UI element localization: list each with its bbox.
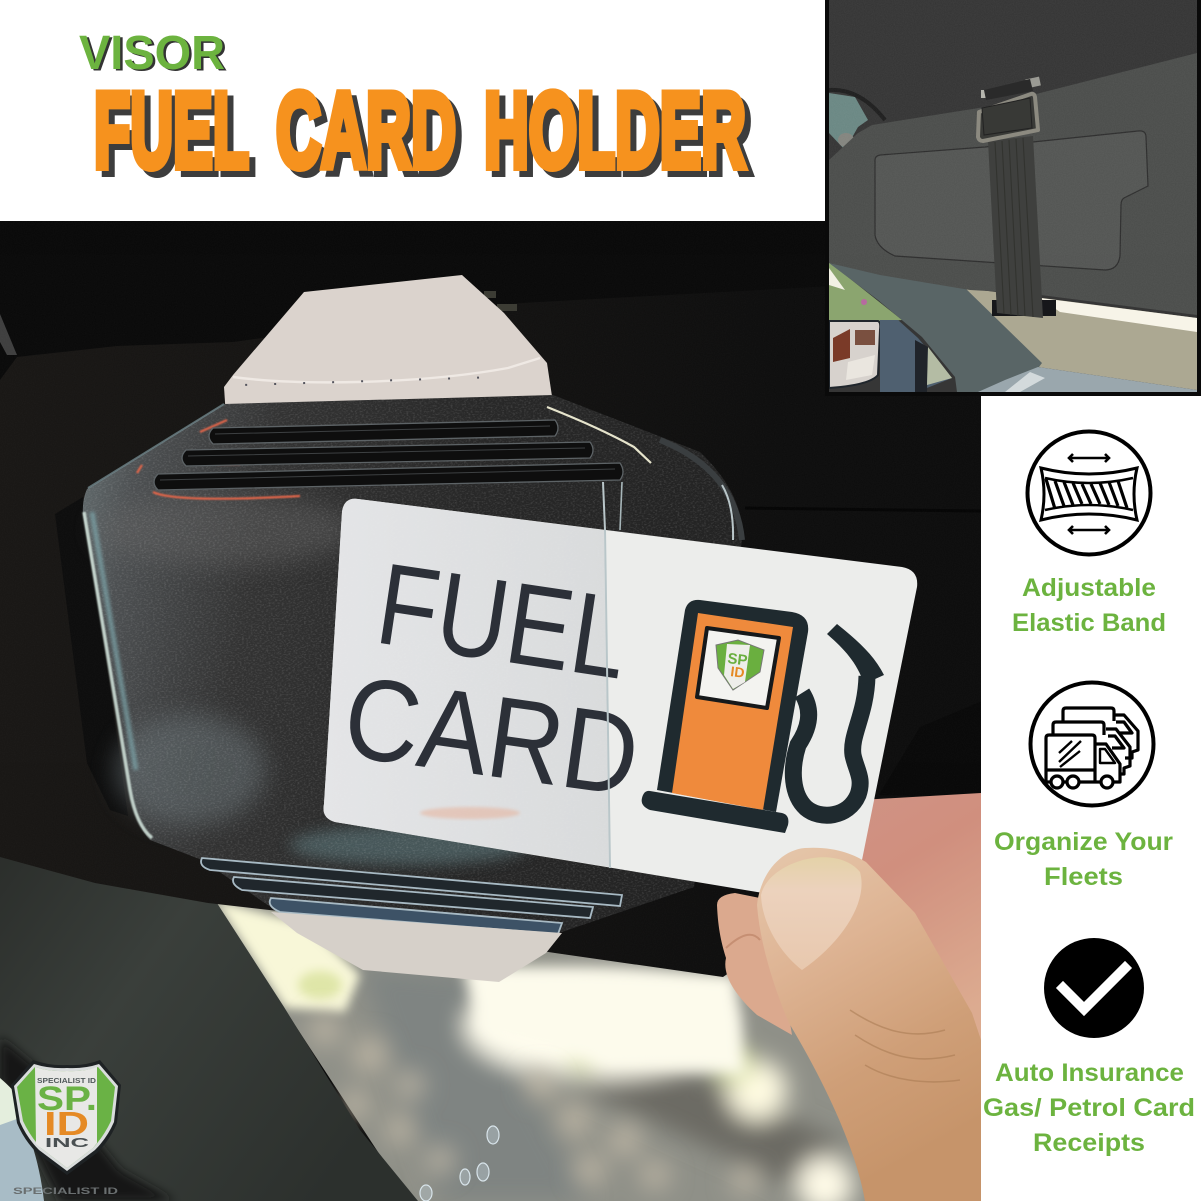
panel: inset photo of elastic band on visor xyxy=(825,0,1201,396)
main photo: visor with fuel card holder xyxy=(0,221,985,1201)
logo: Specialist ID Inc shield xyxy=(11,1060,121,1197)
title: FUEL CARD HOLDER xyxy=(94,70,752,196)
dashboard xyxy=(978,367,1197,392)
card section inside pocket xyxy=(320,495,615,875)
title: VISOR: VISOR xyxy=(79,27,225,80)
visor body xyxy=(829,53,1197,315)
label: Auto Insurance Gas/ Petrol Card Receipts xyxy=(983,1059,1195,1157)
icon: fuel pump xyxy=(642,600,884,833)
label: Organize Your Fleets xyxy=(994,828,1173,891)
blurred outdoor background xyxy=(218,904,865,1201)
label: Auto Insurance Gas/ Petrol Card Receipts: Gas/ Petrol Card xyxy=(983,1094,1195,1122)
icon: check mark xyxy=(1044,938,1144,1038)
thumb xyxy=(757,848,981,1201)
visor mount xyxy=(829,93,868,150)
mini shield logo: SP xyxy=(727,650,748,669)
thumb nail xyxy=(761,857,862,970)
mini shield logo: ID xyxy=(730,663,745,681)
pocket seam xyxy=(603,482,610,868)
icon: elastic band xyxy=(1028,432,1150,554)
blurred corner reflection xyxy=(0,1037,175,1201)
foliage xyxy=(829,262,902,325)
logo wordmark: SPECIALIST ID xyxy=(13,1186,118,1197)
label: Auto Insurance Gas/ Petrol Card Receipts: Receipts xyxy=(1033,1129,1145,1157)
side mirror xyxy=(829,321,880,388)
label: Adjustable Elastic Band xyxy=(1012,574,1166,637)
visor clips xyxy=(484,291,517,311)
clear vinyl pocket xyxy=(80,390,750,940)
strap buckle xyxy=(978,94,1038,141)
hand holding card xyxy=(717,848,981,1201)
card text: CARD: CARD xyxy=(337,651,647,821)
pocket ridges: bottom xyxy=(201,858,622,934)
panel: features column xyxy=(981,396,1201,1201)
A pillar xyxy=(829,263,1042,392)
windshield pillar xyxy=(0,850,418,1201)
orange reflections xyxy=(137,420,300,499)
windshield view xyxy=(965,288,1197,390)
logo text xyxy=(37,1078,97,1150)
visor flap xyxy=(875,131,1148,270)
title: VISOR: VISOR xyxy=(82,28,228,82)
label: Adjustable Elastic Band: Adjustable xyxy=(1022,574,1156,602)
title: FUEL CARD HOLDER: CARD xyxy=(282,76,462,196)
header band xyxy=(0,0,826,220)
icon: truck fleet xyxy=(1030,682,1154,806)
logo text: SP. xyxy=(37,1080,97,1118)
fuel card xyxy=(320,482,917,905)
label: Organize Your Fleets: Organize Your xyxy=(994,828,1173,856)
arrow: bottom stretch xyxy=(1069,526,1109,534)
thumb creases xyxy=(850,1010,960,1082)
mini shield logo xyxy=(716,640,764,690)
title: FUEL CARD HOLDER: FUEL xyxy=(94,70,249,190)
logo text: ID xyxy=(44,1105,89,1142)
windshield water spots xyxy=(420,1126,499,1201)
label: Auto Insurance Gas/ Petrol Card Receipts: Auto Insurance xyxy=(995,1059,1184,1087)
top leather tab xyxy=(224,275,552,404)
strap anchors xyxy=(1025,77,1041,88)
title: FUEL CARD HOLDER: CARD xyxy=(276,70,456,190)
sun visor xyxy=(0,302,727,977)
title: FUEL CARD HOLDER: HOLDER xyxy=(484,70,746,190)
bright patch below visor xyxy=(462,965,745,1075)
logo text: INC xyxy=(45,1135,90,1150)
elastic strap xyxy=(984,79,1043,318)
bright patch beside pillar xyxy=(215,900,360,1012)
label: Adjustable Elastic Band: Elastic Band xyxy=(1012,609,1166,637)
logo text: SPECIALIST ID xyxy=(37,1078,96,1085)
side window xyxy=(880,320,952,392)
pocket ridges: top xyxy=(154,420,623,490)
visor padding shadow xyxy=(55,497,128,816)
card text: FUEL: FUEL xyxy=(369,538,636,704)
title: FUEL CARD HOLDER: HOLDER xyxy=(490,76,752,196)
lower fingers xyxy=(717,893,792,1035)
ceiling xyxy=(829,0,1197,392)
bottom leather tab xyxy=(271,912,562,982)
index finger behind card xyxy=(862,793,981,1040)
arrow: top stretch xyxy=(1069,454,1109,462)
ceiling trim stripe xyxy=(0,314,17,355)
title: FUEL CARD HOLDER: FUEL xyxy=(100,76,255,196)
label: Organize Your Fleets: Fleets xyxy=(1044,863,1123,891)
